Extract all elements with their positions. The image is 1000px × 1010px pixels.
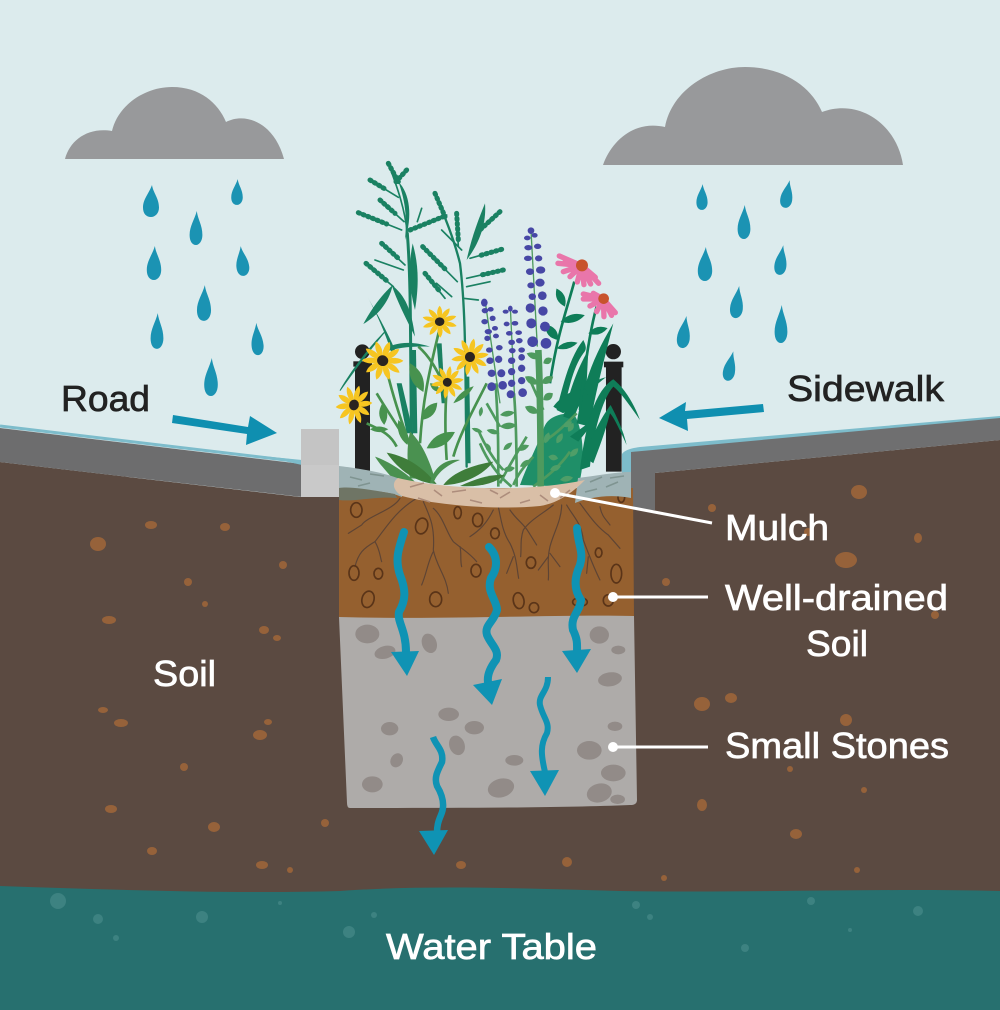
- yellow flowers: [331, 306, 492, 429]
- soil ground: [0, 440, 1000, 900]
- grass blades: [340, 182, 485, 463]
- label: Small Stones: Small Stones: [725, 725, 949, 766]
- wavy arrow: fifth infiltration: [419, 737, 448, 855]
- tall grass: [358, 163, 503, 467]
- well-drained soil layer: [339, 488, 634, 618]
- wavy arrow: first infiltration: [391, 532, 419, 676]
- stones: [355, 625, 626, 805]
- soil pebbles: [349, 492, 625, 613]
- soil speckles: [90, 485, 939, 881]
- roots: [348, 498, 620, 593]
- label: Mulch: Mulch: [725, 507, 829, 548]
- label: Soil: Soil: [153, 653, 216, 694]
- curb: [301, 429, 339, 497]
- wavy arrow: second infiltration: [473, 547, 502, 705]
- label: Sidewalk: Sidewalk: [787, 368, 945, 409]
- fence post: left: [353, 344, 372, 472]
- road: [0, 426, 302, 497]
- right grass blades: [553, 323, 640, 470]
- mulch layer: [339, 466, 631, 508]
- wavy arrow: third infiltration: [562, 528, 591, 673]
- arrow: sidewalk runoff: [659, 402, 764, 431]
- arrow: road runoff: [172, 415, 277, 445]
- label: Well-drained Soil: Well-drained: [725, 577, 948, 618]
- coneflower stems: [550, 282, 597, 410]
- fence post: right: [604, 344, 623, 472]
- yellow flower stems and leaves: [367, 327, 487, 460]
- label: Well-drained Soil: Soil: [806, 623, 868, 664]
- rain drops: right: [676, 179, 795, 382]
- pink coneflowers: [558, 256, 615, 317]
- basal rosette leaves: [375, 432, 505, 486]
- sidewalk: [622, 416, 1000, 510]
- small stones layer: [339, 616, 637, 808]
- purple spike foliage: [471, 227, 580, 487]
- rain drops: left: [143, 179, 264, 396]
- wavy arrow: fourth infiltration: [530, 677, 559, 796]
- label: Road: Road: [61, 378, 150, 419]
- label: Water Table: Water Table: [386, 926, 597, 967]
- water table: [0, 886, 1000, 1010]
- label: Well-drained Soil: [725, 577, 948, 664]
- teal foliage clump: [520, 413, 583, 487]
- cloud: right: [603, 67, 903, 165]
- white label lines and dots: [550, 488, 712, 752]
- cloud: left: [65, 87, 284, 159]
